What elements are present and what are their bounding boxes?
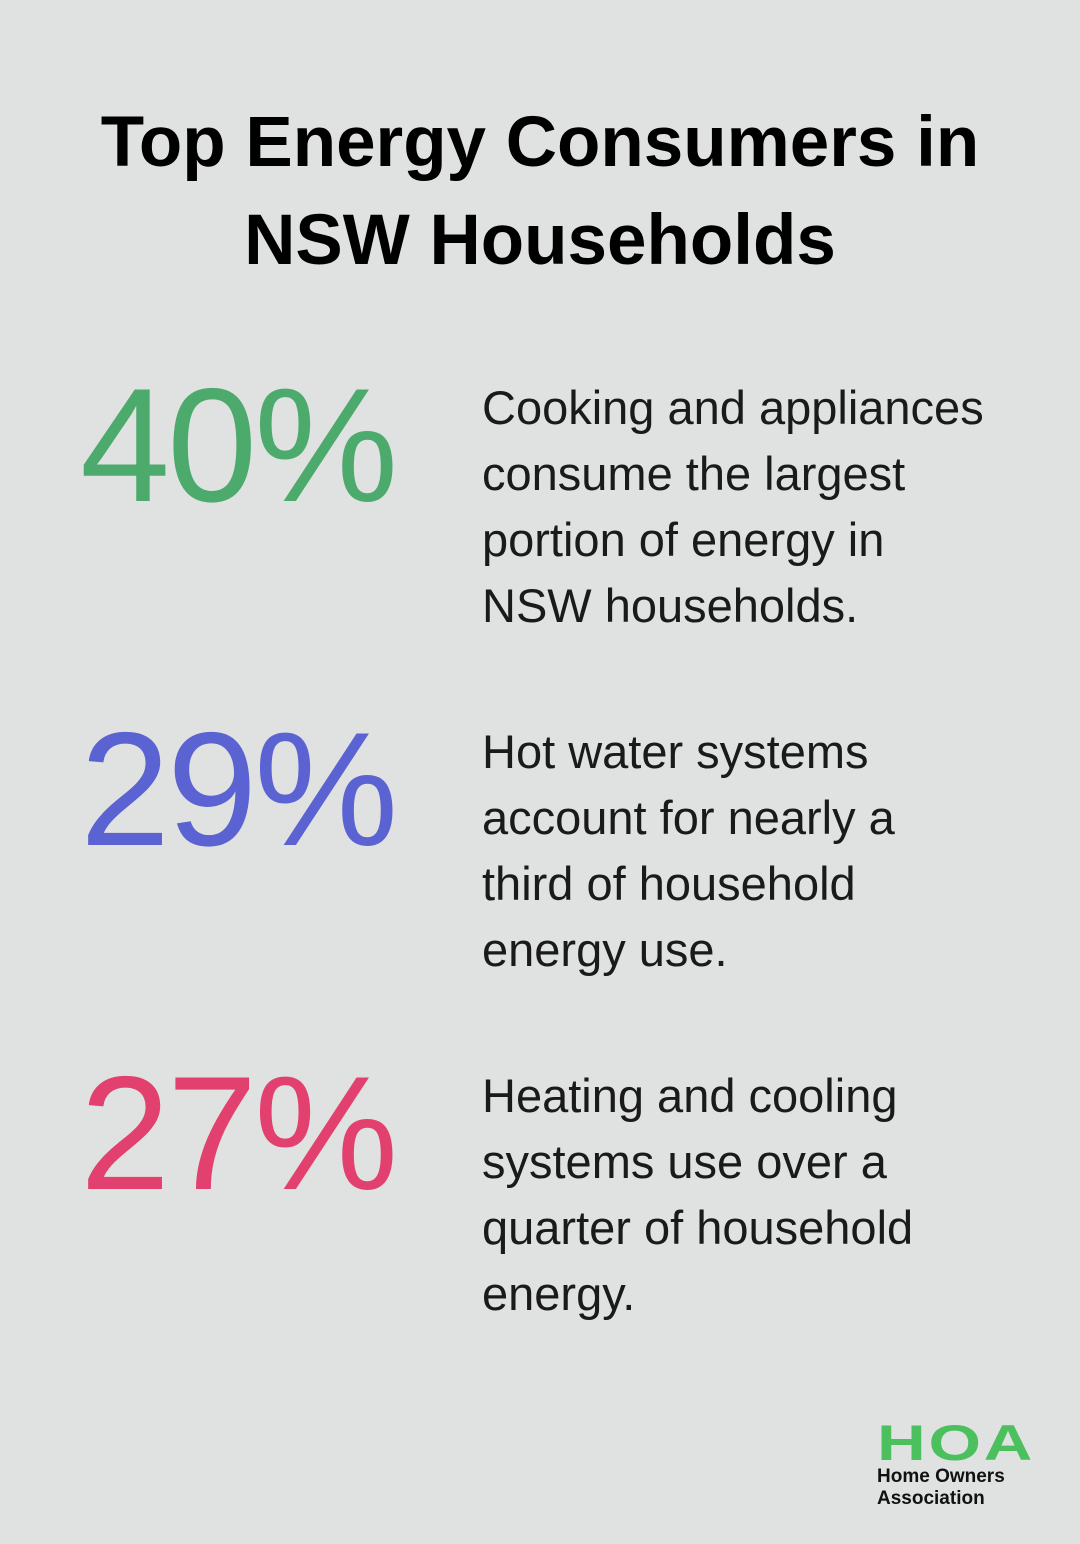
logo: HOA xyxy=(877,1415,1035,1471)
title: NSW Households xyxy=(244,201,836,280)
stat 2 text xyxy=(482,725,895,976)
logo xyxy=(877,1415,1035,1509)
stat 3 text: quarter of household xyxy=(482,1201,913,1254)
stat 1 text xyxy=(482,381,984,632)
title: Top Energy Consumers in xyxy=(101,103,979,182)
stat 1 text: consume the largest xyxy=(482,447,905,500)
logo: Home Owners xyxy=(877,1466,1005,1487)
stat 3 text xyxy=(482,1069,913,1320)
stat 2 text: Hot water systems xyxy=(482,725,869,778)
title xyxy=(101,103,979,280)
stat 1 text: Cooking and appliances xyxy=(482,381,984,434)
stat 1 number: 40% xyxy=(80,355,395,536)
stat 3 text: Heating and cooling xyxy=(482,1069,897,1122)
stat 1 text: NSW households. xyxy=(482,579,858,632)
logo: Association xyxy=(877,1488,985,1509)
stat 3 number: 27% xyxy=(80,1043,395,1224)
stat 2 text: energy use. xyxy=(482,923,728,976)
stat 2 text: third of household xyxy=(482,857,856,910)
stat 3 text: energy. xyxy=(482,1267,635,1320)
stat 3 text: systems use over a xyxy=(482,1135,887,1188)
stat 1 text: portion of energy in xyxy=(482,513,884,566)
stat 2 text: account for nearly a xyxy=(482,791,895,844)
stat 2 number: 29% xyxy=(80,699,395,880)
